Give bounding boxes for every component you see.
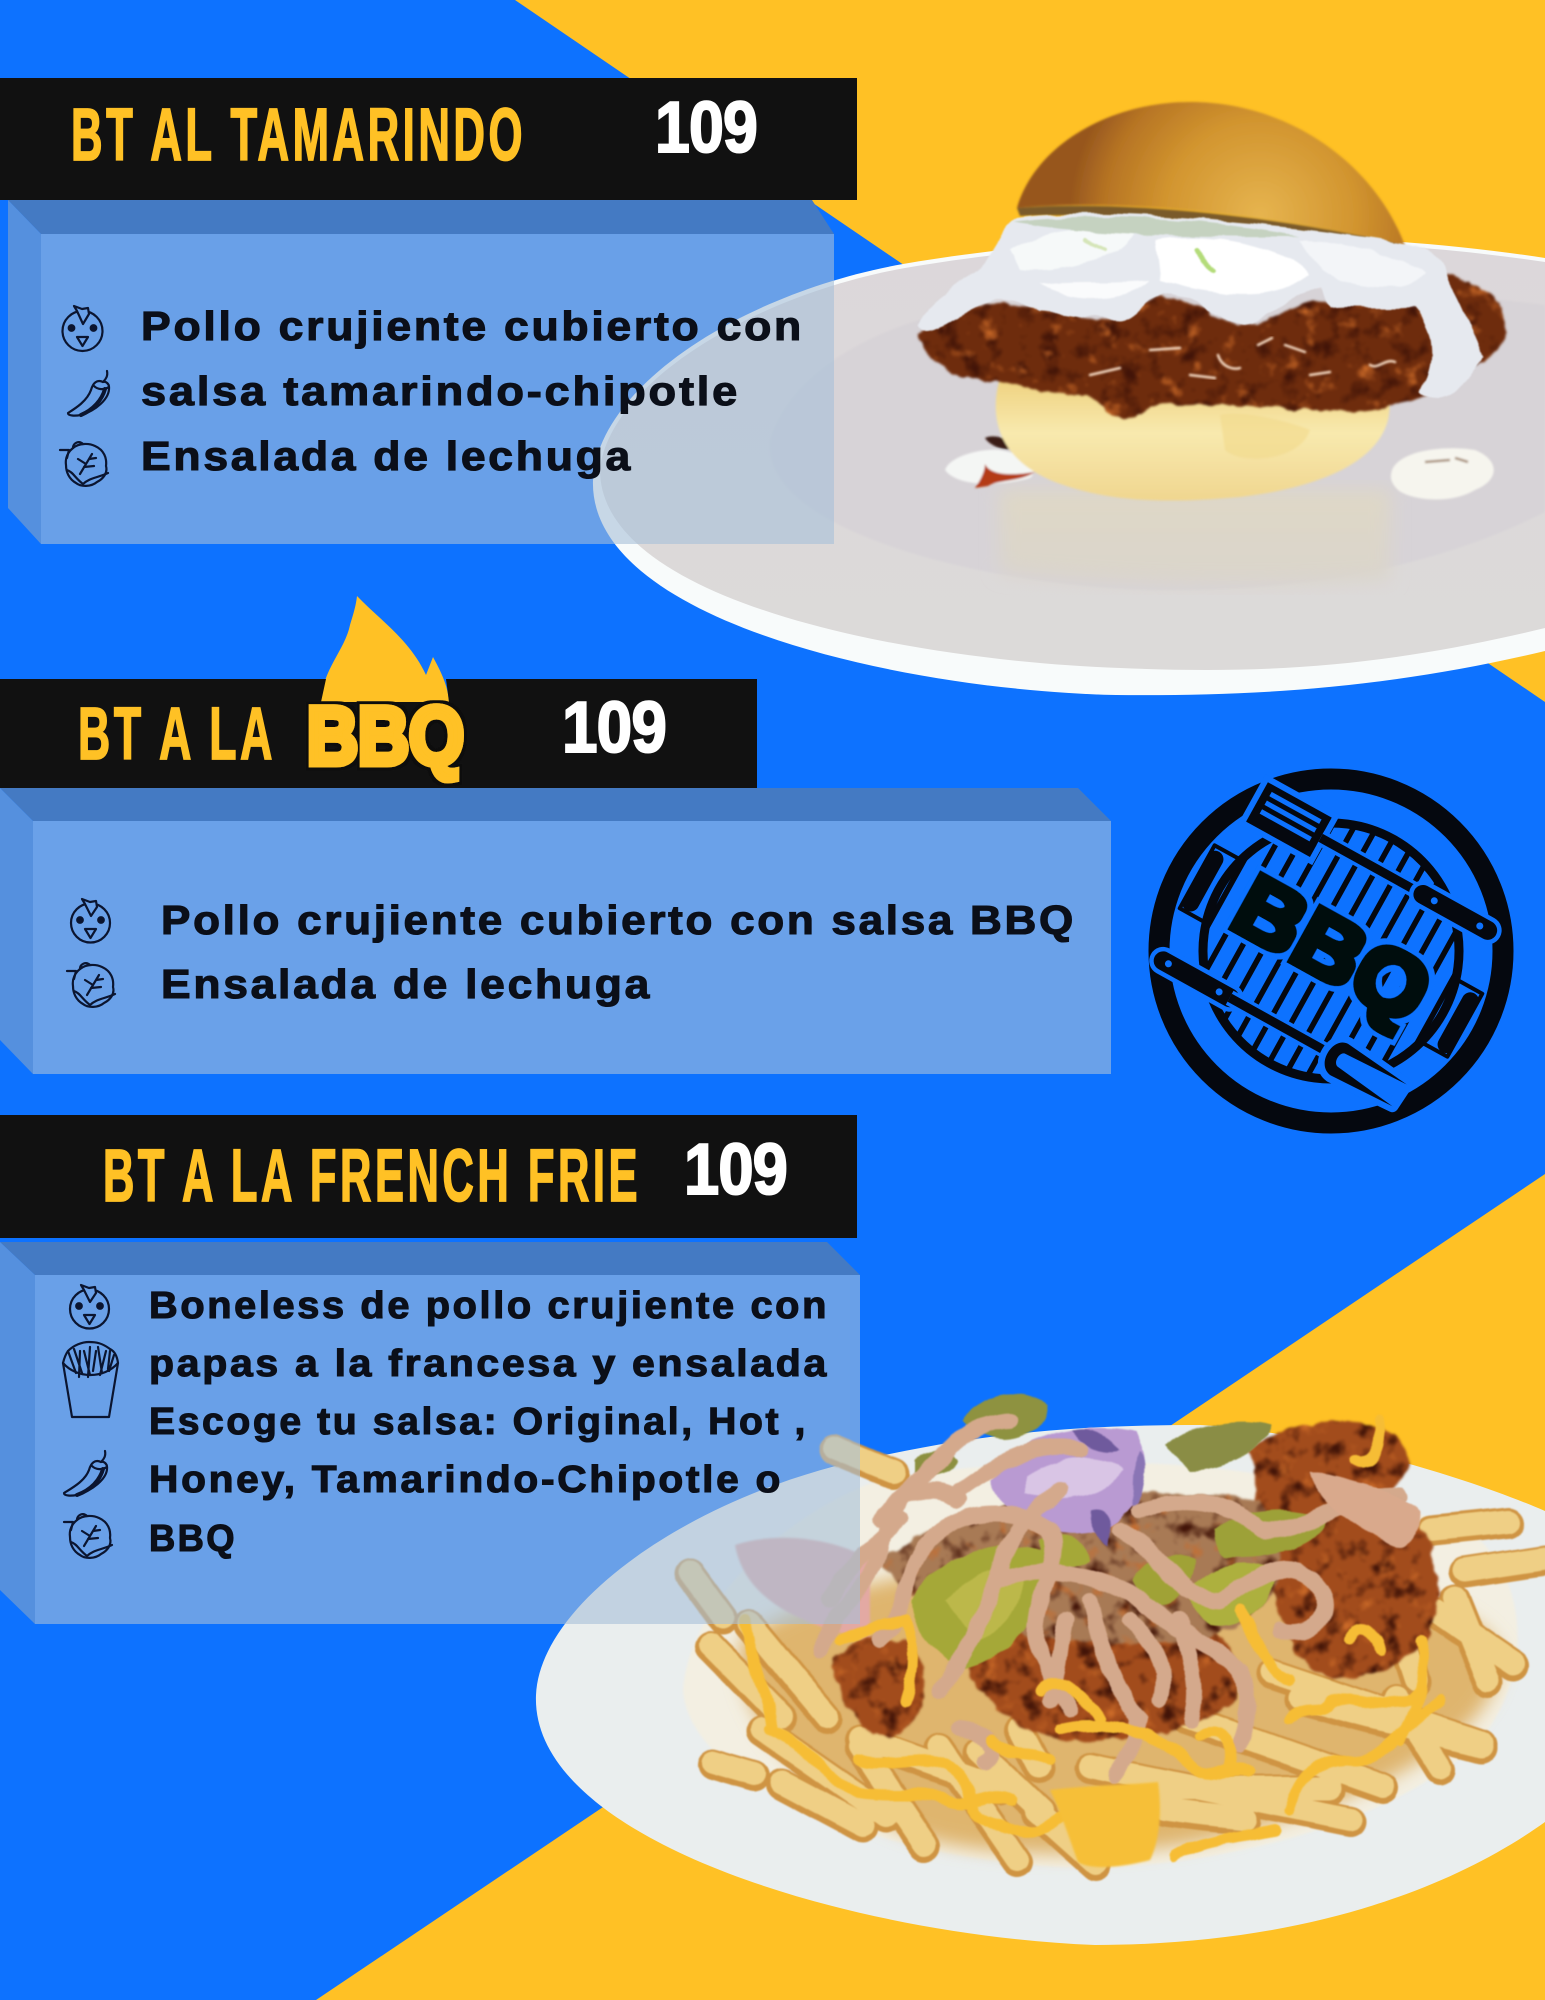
header bar: BT a la BBQ: BT A LA <box>78 692 276 775</box>
icon: lettuce <box>60 442 108 486</box>
header bar: BT a la french frie <box>0 1115 857 1238</box>
pink chipotle drizzle <box>820 1420 1400 1775</box>
header bar: BT al tamarindo: 109 <box>655 88 757 168</box>
bottom bun <box>996 378 1390 501</box>
header bar: BT a la french frie: 109 <box>684 1130 787 1210</box>
photo: chicken burger on plate <box>593 102 1545 695</box>
purple cabbage <box>990 1428 1145 1545</box>
panel: bbq <box>0 788 1111 1074</box>
text block: bbq ingredients: Pollo crujiente cubierto con salsa BBQ <box>161 897 1076 943</box>
white sauce <box>916 214 1484 398</box>
text block: french fries description: BBQ <box>149 1518 237 1560</box>
text block: tamarindo ingredients: Ensalada de lechuga <box>141 433 633 479</box>
icon: chicken <box>70 1285 109 1328</box>
top bun <box>1017 102 1405 246</box>
panel: tamarindo <box>8 200 834 544</box>
icon: chili pepper <box>68 371 109 416</box>
icon: chicken <box>71 899 110 942</box>
text block: tamarindo ingredients: Pollo crujiente cubierto con <box>141 303 804 349</box>
header bar: BT a la BBQ <box>0 679 757 788</box>
text block: french fries description: Escoge tu salsa: Original, Hot , <box>149 1401 808 1443</box>
header bar: BT a la BBQ: 109 <box>562 688 666 768</box>
icon: lettuce <box>67 963 115 1007</box>
background: bottom yellow triangle <box>316 1174 1545 2000</box>
panel: french fries <box>0 1242 860 1624</box>
spatula <box>1246 782 1499 950</box>
text block: french fries description: Honey, Tamarindo-Chipotle o <box>149 1459 783 1501</box>
grill bars <box>1208 828 1454 1073</box>
photo: boneless chicken with french fries on plate <box>536 1394 1545 1945</box>
header bar: BT a la BBQ: BBQ <box>307 691 464 782</box>
background: top yellow triangle <box>515 0 1545 702</box>
fries bed <box>739 1560 1501 1854</box>
logo: BBQ grill stamp <box>1134 763 1528 1139</box>
right sauce blob <box>1391 448 1494 499</box>
outer ring <box>1159 779 1503 1123</box>
grill rim <box>1157 777 1505 1125</box>
text block: french fries description: Boneless de pollo crujiente con <box>149 1285 829 1327</box>
left sauce blob <box>945 450 1034 484</box>
text block: tamarindo ingredients <box>141 303 804 479</box>
fried chicken <box>916 276 1506 419</box>
pickle slices <box>912 1394 1325 1668</box>
text block: bbq ingredients <box>161 897 1076 1007</box>
chicken glaze highlights <box>1090 338 1395 378</box>
icon: chili pepper <box>64 1451 107 1496</box>
icon: chicken <box>62 306 102 351</box>
grill side handles <box>1180 845 1482 1057</box>
text block: bbq ingredients: Ensalada de lechuga <box>161 961 652 1007</box>
chicken pieces <box>834 1422 1438 1741</box>
french fries <box>690 1448 1545 1866</box>
icon: french fries cup <box>63 1342 118 1417</box>
pale salad under panel <box>735 1538 870 1640</box>
header bar: BT al tamarindo <box>0 78 857 200</box>
header bar: BT al tamarindo: BT AL TAMARINDO <box>71 93 526 176</box>
header bar: BT a la french frie: BT A LA FRENCH FRIE <box>103 1134 641 1217</box>
icon: lettuce <box>64 1514 112 1558</box>
cheese puddle <box>1050 1782 1160 1867</box>
text block: tamarindo ingredients: salsa tamarindo-chipotle <box>141 368 740 414</box>
text block: french fries description: papas a la francesa y ensalada <box>149 1343 829 1385</box>
text block: french fries description <box>149 1285 829 1560</box>
yellow cheese drizzle <box>745 1420 1440 1856</box>
icon: flame <box>321 596 449 702</box>
fork <box>1153 945 1411 1111</box>
logo lettering: BBQ <box>1217 855 1447 1043</box>
